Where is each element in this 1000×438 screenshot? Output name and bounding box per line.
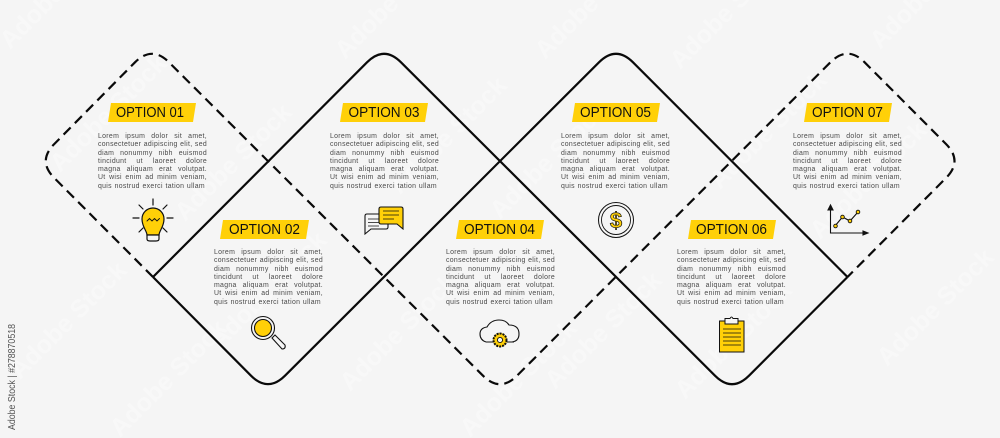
text block: option 04 <box>446 248 555 306</box>
text block: option 07: Lorem ipsum dolor sit amet, <box>793 133 902 140</box>
text block: option 03: Lorem ipsum dolor sit amet, <box>330 133 439 140</box>
label: option 04: OPTION 04 <box>464 222 535 238</box>
text block: option 02: Lorem ipsum dolor sit amet, <box>214 249 323 256</box>
text block: option 02: diam nonummy nibh euismod <box>214 266 323 273</box>
text block: option 03: Ut wisi enim ad minim veniam, <box>330 174 439 181</box>
text block: option 01: quis nostrud exerci tation ullam <box>98 183 205 190</box>
text: Adobe Stock <box>384 71 512 199</box>
text: Adobe Stock <box>169 98 297 226</box>
text block: option 06: magna aliquam erat volutpat. <box>677 282 786 289</box>
text block: option 06: quis nostrud exerci tation ullam <box>677 299 784 306</box>
label: option 05: OPTION 05 <box>580 105 651 121</box>
label: option 02: OPTION 02 <box>229 222 300 238</box>
text: Adobe Stock <box>204 226 332 354</box>
text: Adobe Stock <box>334 268 462 396</box>
text block: option 01: consectetuer adipiscing elit, sed <box>98 141 207 148</box>
text block: option 02: Ut wisi enim ad minim veniam, <box>214 290 323 297</box>
text block: option 01: Ut wisi enim ad minim veniam, <box>98 174 207 181</box>
icon: clipboard <box>720 317 744 352</box>
text block: option 06: Lorem ipsum dolor sit amet, <box>677 249 786 256</box>
label: option 07: OPTION 07 <box>812 105 883 121</box>
text block: option 04: diam nonummy nibh euismod <box>446 266 555 273</box>
text block: option 01: magna aliquam erat volutpat. <box>98 166 207 173</box>
text block: option 01: diam nonummy nibh euismod <box>98 150 207 157</box>
text block: option 03: consectetuer adipiscing elit, sed <box>330 141 439 148</box>
text block: option 03: quis nostrud exerci tation ullam <box>330 183 437 190</box>
label: option 06: OPTION 06 <box>696 222 767 238</box>
text block: option 02: consectetuer adipiscing elit, sed <box>214 257 323 264</box>
text block: option 06 <box>677 248 786 306</box>
text block: option 05: tincidunt ut laoreet dolore <box>561 158 670 165</box>
text block: option 07: quis nostrud exerci tation ullam <box>793 183 900 190</box>
text block: option 06: consectetuer adipiscing elit, sed <box>677 257 786 264</box>
icon: light bulb <box>133 199 173 241</box>
text block: option 04: quis nostrud exerci tation ullam <box>446 299 553 306</box>
text block: option 03 <box>330 132 439 190</box>
text block: option 06: diam nonummy nibh euismod <box>677 266 786 273</box>
text block: option 05: consectetuer adipiscing elit, sed <box>561 141 670 148</box>
solid outline: diamonds 3 and 6 <box>153 54 848 384</box>
text block: option 03: magna aliquam erat volutpat. <box>330 166 439 173</box>
icon: magnifying glass <box>252 316 285 349</box>
text block: option 07 <box>793 132 902 190</box>
stock id text: Adobe Stock | #278870518 <box>6 324 18 430</box>
text block: option 02: tincidunt ut laoreet dolore <box>214 274 323 281</box>
text block: option 02 <box>214 248 323 306</box>
text block: option 07: Ut wisi enim ad minim veniam, <box>793 174 902 181</box>
icon: line chart <box>828 205 868 235</box>
text block: option 06: Ut wisi enim ad minim veniam, <box>677 290 786 297</box>
label: option 03: OPTION 03 <box>348 105 420 121</box>
text block: option 05 <box>561 132 670 190</box>
text block: option 02: quis nostrud exerci tation ullam <box>214 299 321 306</box>
text: Adobe Stock <box>44 49 172 177</box>
text block: option 03: diam nonummy nibh euismod <box>330 150 439 157</box>
icon: dollar coin <box>598 202 634 238</box>
dashed outline: diamonds 1, 4 and 7 <box>46 54 955 384</box>
text block: option 05: Ut wisi enim ad minim veniam, <box>561 174 670 181</box>
text block: option 05: Lorem ipsum dolor sit amet, <box>561 133 670 140</box>
label: option 01: OPTION 01 <box>116 105 184 121</box>
text block: option 07: diam nonummy nibh euismod <box>793 150 902 157</box>
text block: option 04: consectetuer adipiscing elit, sed <box>446 257 555 264</box>
text: Adobe Stock <box>669 276 797 404</box>
text: Adobe Stock <box>871 243 999 371</box>
text: Adobe Stock <box>539 266 667 394</box>
text block: option 01: tincidunt ut laoreet dolore <box>98 158 207 165</box>
text: Adobe Stock <box>484 96 612 224</box>
text block: option 04: magna aliquam erat volutpat. <box>446 282 555 289</box>
text block: option 05: magna aliquam erat volutpat. <box>561 166 670 173</box>
icon: dollar coin: $ <box>610 208 622 233</box>
text block: option 04: Ut wisi enim ad minim veniam, <box>446 290 555 297</box>
text block: option 01 <box>98 132 207 190</box>
text: Adobe Stock <box>804 116 932 244</box>
text block: option 05: diam nonummy nibh euismod <box>561 150 670 157</box>
text block: option 07: magna aliquam erat volutpat. <box>793 166 902 173</box>
text block: option 01: Lorem ipsum dolor sit amet, <box>98 133 207 140</box>
text block: option 07: tincidunt ut laoreet dolore <box>793 158 902 165</box>
solid outline: diamonds 2 and 5 <box>153 54 848 384</box>
icon: cloud with gear <box>480 320 519 346</box>
text: Adobe Stock <box>4 256 132 384</box>
text block: option 03: tincidunt ut laoreet dolore <box>330 158 439 165</box>
text block: option 04: Lorem ipsum dolor sit amet, <box>446 249 555 256</box>
text block: option 05: quis nostrud exerci tation ullam <box>561 183 668 190</box>
text block: option 04: tincidunt ut laoreet dolore <box>446 274 555 281</box>
text: Adobe Stock <box>704 66 832 194</box>
icon: chat bubbles <box>365 207 403 234</box>
text block: option 06: tincidunt ut laoreet dolore <box>677 274 786 281</box>
text block: option 07: consectetuer adipiscing elit, sed <box>793 141 902 148</box>
text block: option 02: magna aliquam erat volutpat. <box>214 282 323 289</box>
